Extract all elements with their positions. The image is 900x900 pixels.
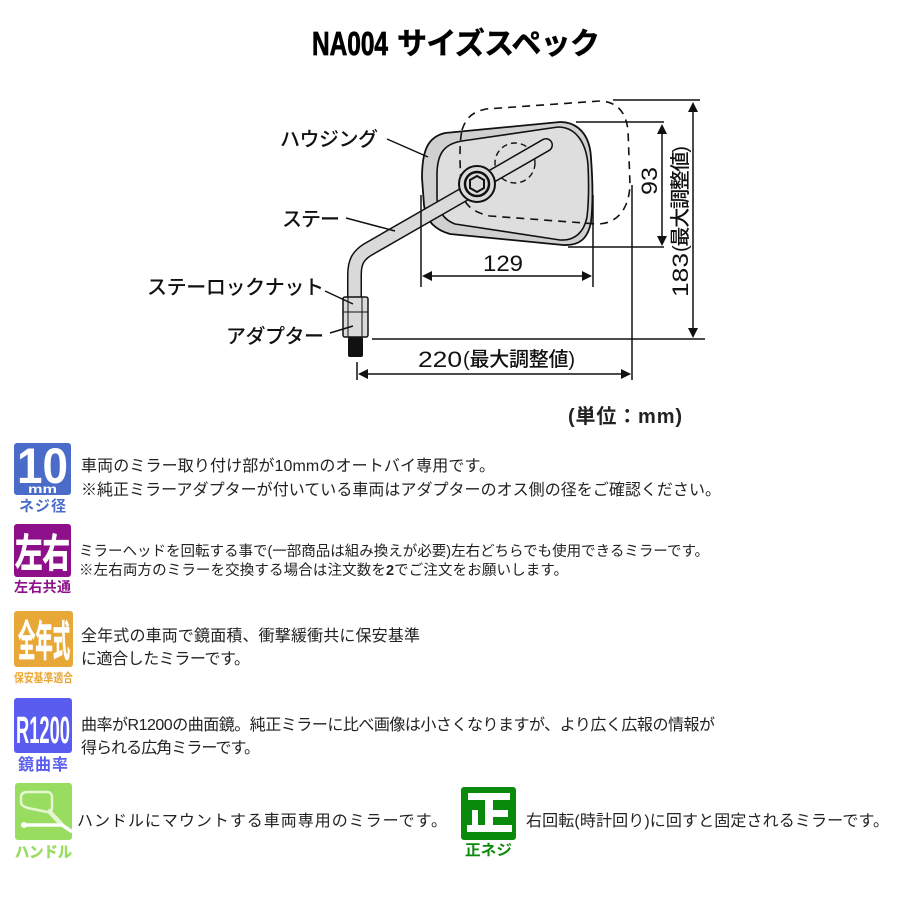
mirror glass [437,127,589,240]
text: all model years note: に適合したミラーです。 [81,650,250,668]
icon: left and right: 左右 [15,532,70,576]
text: all model years note [81,627,420,668]
icon: all model years [14,611,73,685]
text: left and right note [79,543,709,579]
dimension: width 129: 129 [483,251,523,276]
icon: handlebar mount [15,783,72,861]
icon: R1200 curvature: 鏡曲率 [18,756,68,774]
text: left and right note: ミラーヘッドを回転する事で(一部商品は組み換えが必要)左右どちらでも使用できるミラーです。 [79,543,709,560]
lock nut and adapter [343,297,368,357]
part labels [147,128,428,348]
icon: 10mm thread [14,438,71,515]
text: curvature note: 得られる広角ミラーです。 [81,739,260,757]
icon: 10mm thread: ネジ径 [19,498,66,515]
dimension: max length 220 [357,185,632,380]
dimension: height 93 [568,122,667,247]
adjustment range dashed outline [460,101,630,224]
label: stay: ステー [282,209,340,231]
icon: right-hand thread: 正ネジ [465,842,512,859]
icon: 10mm thread: 10 [17,438,68,494]
text: thread note: ※純正ミラーアダプターが付いている車両はアダプターのオス側の径をご確認ください。 [81,481,721,499]
text: thread note: 車両のミラー取り付け部が10mmのオートバイ専用です。 [81,457,495,475]
dimension: max height 183: (最大調整値) [669,146,692,252]
icon: R1200 curvature [14,698,72,774]
title: サイズスペック [397,27,600,61]
label: housing: ハウジング [280,128,378,151]
icon: handlebar mount: ハンドル [15,844,72,861]
mirror housing [422,122,592,245]
unit note: (単位：mm) [568,405,682,428]
mirror arm [480,145,546,183]
text: right-hand thread note: 右回転(時計回り)に回すと固定されるミラーです。 [526,812,889,830]
dimension: max length 220: (最大調整値) [463,348,575,371]
icon: R1200 curvature: R1200 [16,710,70,752]
pivot dashed circle [495,143,535,183]
icon: left and right [14,524,71,595]
text: handlebar note: ハンドルにマウントする車両専用のミラーです。 [77,812,447,830]
icon: all model years: 保安基準適合 [14,670,73,685]
label: stay lock nut [147,276,353,304]
icon: right-hand thread [461,787,516,859]
label: stay [282,209,395,231]
icon: left and right: 左右共通 [14,579,71,595]
mirror diagram [343,101,630,357]
dimension: max length 220: 220 [418,347,462,372]
dimension: height 93: 93 [637,167,662,195]
dimension: max height 183 [372,100,705,339]
title: NA004 [312,25,388,62]
icon: all model years: 全年式 [18,618,70,665]
label: adapter: アダプター [226,325,324,348]
text: thread note [81,457,721,499]
text: all model years note: 全年式の車両で鏡面積、衝撃緩衝共に保安基準 [81,627,420,645]
icon: 10mm thread: mm [28,482,57,496]
hub nut [459,166,495,202]
label: stay lock nut: ステーロックナット [147,276,324,299]
text: left and right note: ※左右両方のミラーを交換する場合は注文数を2でご注文をお願いします。 [79,562,568,579]
stay [354,192,468,297]
text: curvature note: 曲率がR1200の曲面鏡。純正ミラーに比べ画像は小さくなりますが、より広く広報の情報が [81,716,715,734]
dimension: width 129 [421,195,593,287]
dimension: max height 183: 183 [668,253,693,297]
label: housing [280,128,428,157]
text: curvature note [81,716,715,757]
title [312,25,600,62]
